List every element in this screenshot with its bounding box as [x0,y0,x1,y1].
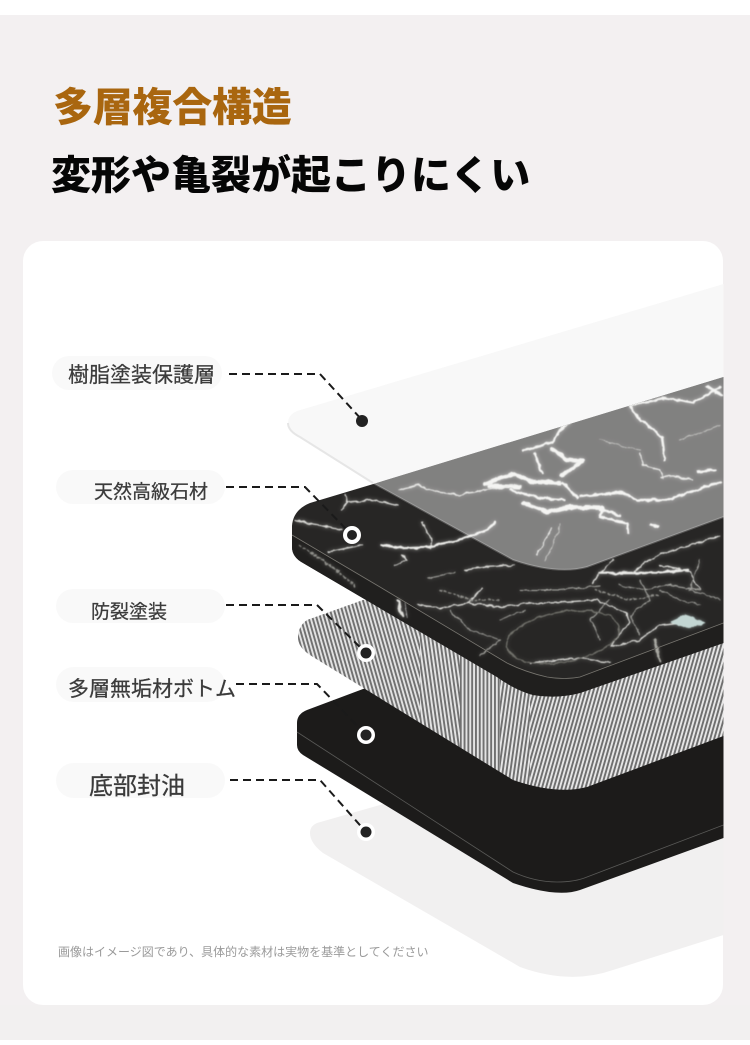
leader line: resin coat [229,374,368,427]
heading: black subtitle: 変形や亀裂が起こりにくい [51,154,530,198]
label: resin coat: 樹脂塗装保護層 [68,364,215,387]
leader line: anti-crack coating [226,605,375,662]
label: resin coat [52,356,222,390]
layer: multilayer board [296,688,724,893]
marble veins [295,387,722,672]
footnote: 画像はイメージ図であり、具体的な素材は実物を基準としてください [58,945,428,959]
panel: white card [23,241,723,1005]
layer: natural marble [292,377,724,697]
label: multilayer board: 多層無垢材ボトム [68,678,236,701]
label: multilayer board [56,667,225,702]
layer: anti-crack coating [298,600,724,790]
layered material diagram [226,373,724,977]
leader line: board [236,684,375,744]
label: anti-crack coating: 防裂塗装 [91,602,167,623]
layer: bottom sealing oil [310,804,723,977]
layer: transparent resin coat over marble [373,377,724,571]
layer: resin coat base [287,423,374,484]
leader line: bottom sealing [230,780,375,841]
label: bottom sealing oil [56,763,225,798]
label: natural marble [56,470,225,504]
label: bottom sealing oil: 底部封油 [89,773,185,800]
heading: gold title: 多層複合構造 [53,86,292,130]
leader line: marble [226,487,361,544]
label: anti-crack coating [56,589,225,623]
label: natural marble: 天然高級石材 [94,482,208,503]
marble edge line [292,535,724,678]
